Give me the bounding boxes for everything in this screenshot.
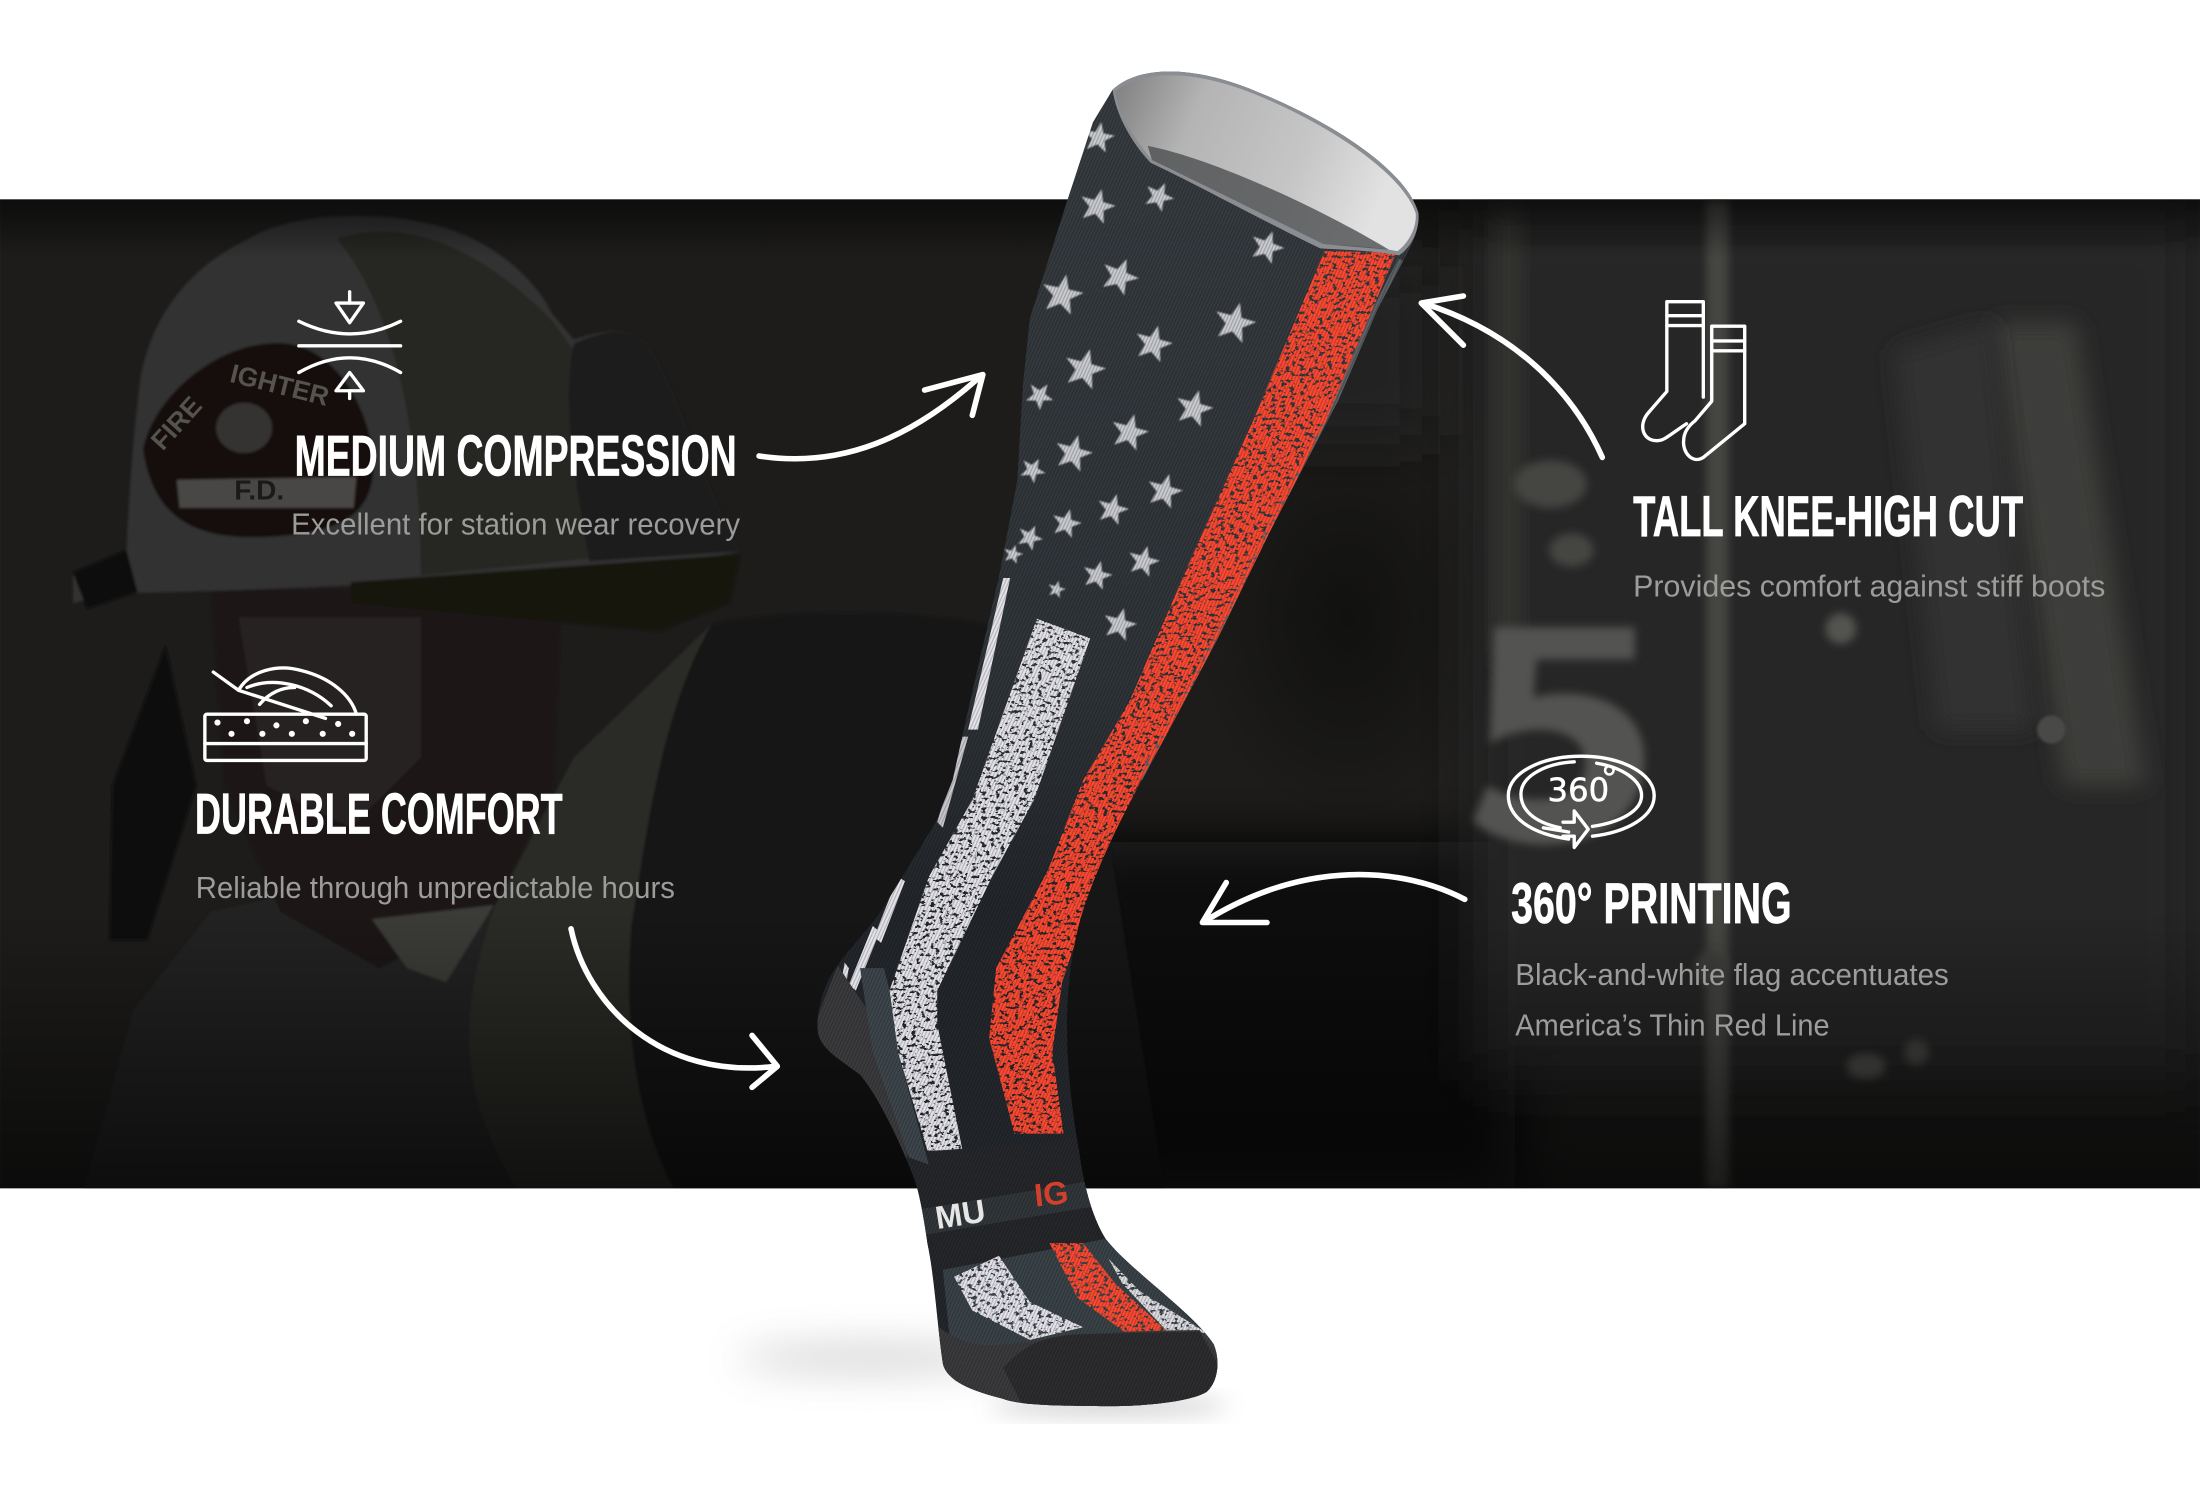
text: printing description: Black-and-white flag accentuates <box>1515 959 1949 992</box>
icon: 360 rotation <box>1508 756 1654 847</box>
arrow: printing to sock <box>1202 875 1465 923</box>
heading: 360 printing: 360° PRINTING <box>1511 872 1792 936</box>
text: comfort description: Reliable through unpredictable hours <box>196 872 675 905</box>
photo: helmet shield lettering: FIRE <box>145 391 208 456</box>
sock: stars <box>1001 119 1288 643</box>
icon: compression arrows <box>299 292 401 398</box>
sock: logo letters on ankle <box>933 1174 1070 1236</box>
photo: blurred station background on right <box>1473 199 2200 1188</box>
sock: logo letters on ankle: IG <box>1032 1174 1070 1214</box>
feature: durable comfort <box>195 668 675 905</box>
icon: 360 rotation: 360 <box>1548 771 1609 809</box>
photo band: firefighter background <box>0 199 2200 1188</box>
feature: tall knee-high cut <box>1633 302 2105 603</box>
photo: helmet shield lettering: IGHTER <box>227 358 332 412</box>
feature: 360 printing <box>1508 756 1949 1042</box>
arrow: compression to sock <box>759 375 983 459</box>
sock: ankle band <box>917 1148 1114 1259</box>
photo: helmet shield lettering <box>150 364 328 500</box>
arrow: comfort to sock <box>571 929 777 1087</box>
sock: rib texture <box>818 72 1410 1406</box>
sock: thin red line stripe <box>989 251 1396 1134</box>
sock body <box>818 72 1418 1406</box>
icon: pair of socks <box>1643 302 1745 459</box>
photo: centre dark area <box>1066 267 1515 1188</box>
sock: cuff opening <box>1113 72 1419 255</box>
sock: toe cap and sole <box>933 1326 1228 1410</box>
heading: durable comfort: DURABLE COMFORT <box>195 782 563 846</box>
sock shadow <box>737 1346 1228 1416</box>
sock: logo letters on ankle: MU <box>933 1193 988 1236</box>
text: knee-high description: Provides comfort against stiff boots <box>1633 570 2105 603</box>
sock: heel patch <box>818 966 908 1159</box>
text: printing description <box>1515 959 1949 1042</box>
photo: firefighter figure <box>73 216 1165 1188</box>
sock: white stripes <box>836 578 1090 1150</box>
product: knee-high sock <box>818 72 1419 1406</box>
heading: medium compression: MEDIUM COMPRESSION <box>295 425 737 489</box>
sock: toe print <box>943 1239 1221 1382</box>
text: printing description: America’s Thin Red Line <box>1515 1009 1830 1042</box>
arrow: knee-high to sock cuff <box>1421 296 1602 457</box>
feature: medium compression <box>291 292 741 542</box>
text: compression description: Excellent for station wear recovery <box>291 509 741 542</box>
photo: helmet shield lettering: F.D. <box>234 474 284 505</box>
icon: leaf on cushion <box>205 668 366 760</box>
